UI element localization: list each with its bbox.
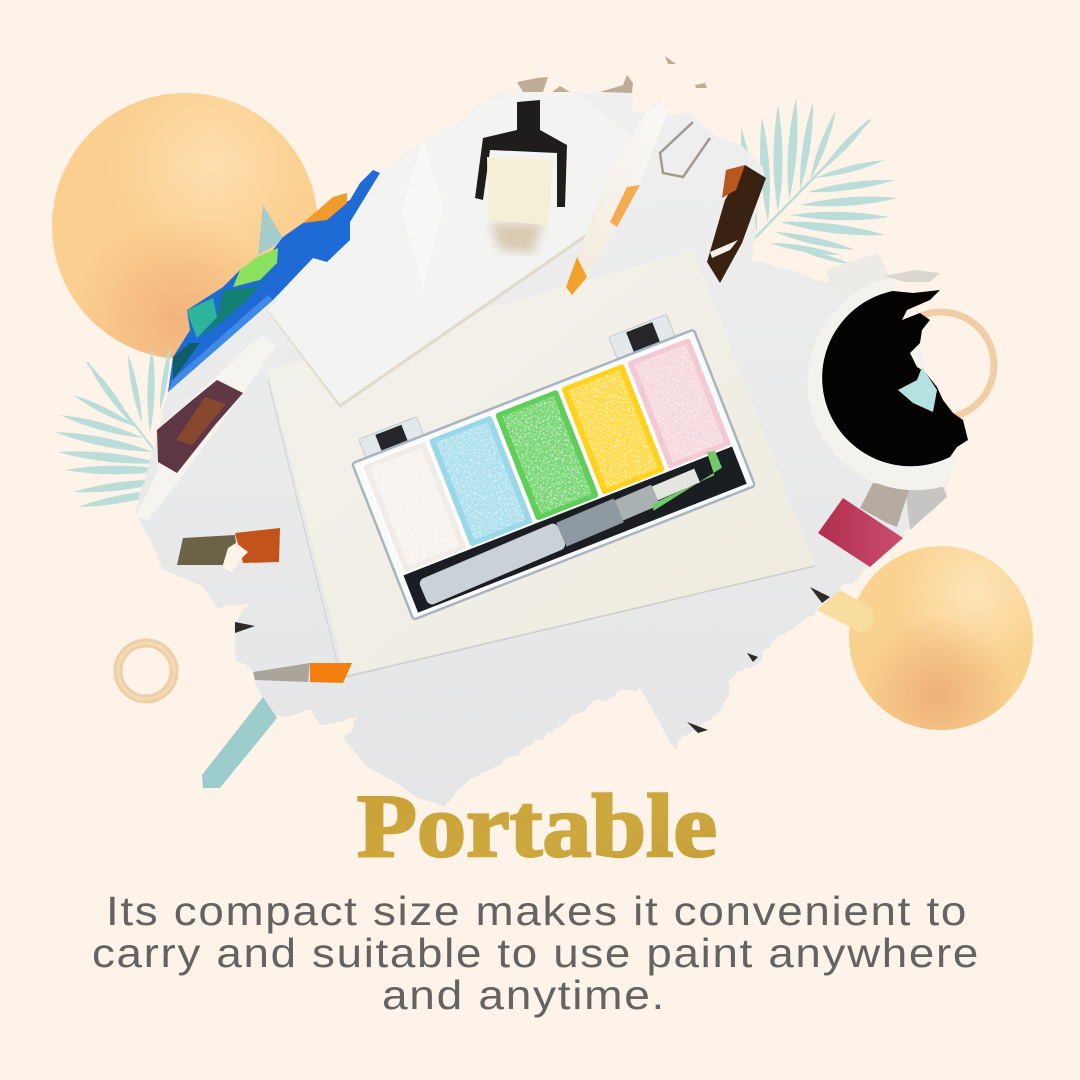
description text: and anytime. — [382, 972, 666, 1018]
description text: carry and suitable to use paint anywhere — [92, 930, 980, 976]
decorative ring: bottom left — [118, 643, 174, 699]
green well — [492, 387, 602, 524]
decorative ring: behind cup — [888, 312, 994, 418]
small brush: bottom — [253, 663, 352, 683]
yellow well — [558, 361, 668, 498]
decorative circle: bottom right — [849, 546, 1033, 730]
green paint dome — [233, 248, 278, 287]
decorative tab on circle — [817, 590, 874, 632]
coffee cup — [808, 253, 968, 490]
cup body — [808, 278, 957, 490]
cup handle — [825, 253, 892, 302]
sheet left edge line — [268, 380, 337, 662]
black flecks — [235, 587, 830, 733]
photo: paper sheets — [268, 80, 815, 677]
paint gap — [222, 543, 248, 572]
large sheet — [274, 385, 814, 674]
top sheet shadow — [268, 234, 586, 408]
blue well — [426, 413, 536, 549]
water brush pen — [416, 449, 727, 606]
teal paint dome — [187, 298, 217, 338]
roller sponge — [487, 157, 553, 225]
description text — [92, 888, 980, 1018]
tube body — [136, 334, 276, 520]
roller frame — [475, 100, 567, 207]
palm leaf: top right — [737, 98, 898, 266]
clip shadow region — [905, 487, 947, 530]
paper clip wire: top — [660, 122, 710, 177]
brown paint brush — [707, 165, 766, 283]
teal brush handle — [202, 697, 277, 788]
orange paint dome — [303, 193, 347, 223]
paint stained stick — [566, 103, 667, 295]
palette knife: white — [402, 137, 443, 290]
pink well — [624, 335, 734, 472]
dark teal patch — [173, 343, 200, 380]
teal triangle — [258, 205, 284, 255]
title: Portable — [357, 777, 717, 876]
decorative circle: top left — [52, 93, 318, 359]
photo debris: top specks — [517, 56, 707, 93]
paper clip: pink — [818, 483, 947, 567]
tube paint smear — [157, 380, 243, 473]
ruler highlight — [168, 295, 273, 392]
right clip — [609, 314, 675, 359]
left clip — [359, 417, 424, 460]
clip wires — [860, 483, 910, 527]
sponge roller — [475, 100, 567, 253]
tray — [352, 329, 755, 620]
watercolor palette — [343, 307, 755, 620]
description text: Its compact size makes it convenient to — [106, 888, 968, 934]
blue paint ruler — [168, 170, 380, 392]
coffee gap — [898, 367, 937, 412]
top sheet — [270, 93, 590, 404]
clip body — [818, 498, 903, 567]
deep green patch — [200, 270, 273, 338]
roller shadow — [490, 223, 543, 253]
paint tube — [136, 334, 276, 520]
black strip — [403, 446, 747, 613]
cup debris — [884, 270, 940, 282]
palm leaf: left — [54, 347, 177, 511]
white well — [360, 439, 470, 575]
small paint brush: left — [177, 528, 280, 572]
sheet bottom edge line — [345, 566, 815, 677]
paint splash photo base — [135, 93, 950, 806]
coffee — [822, 290, 968, 466]
